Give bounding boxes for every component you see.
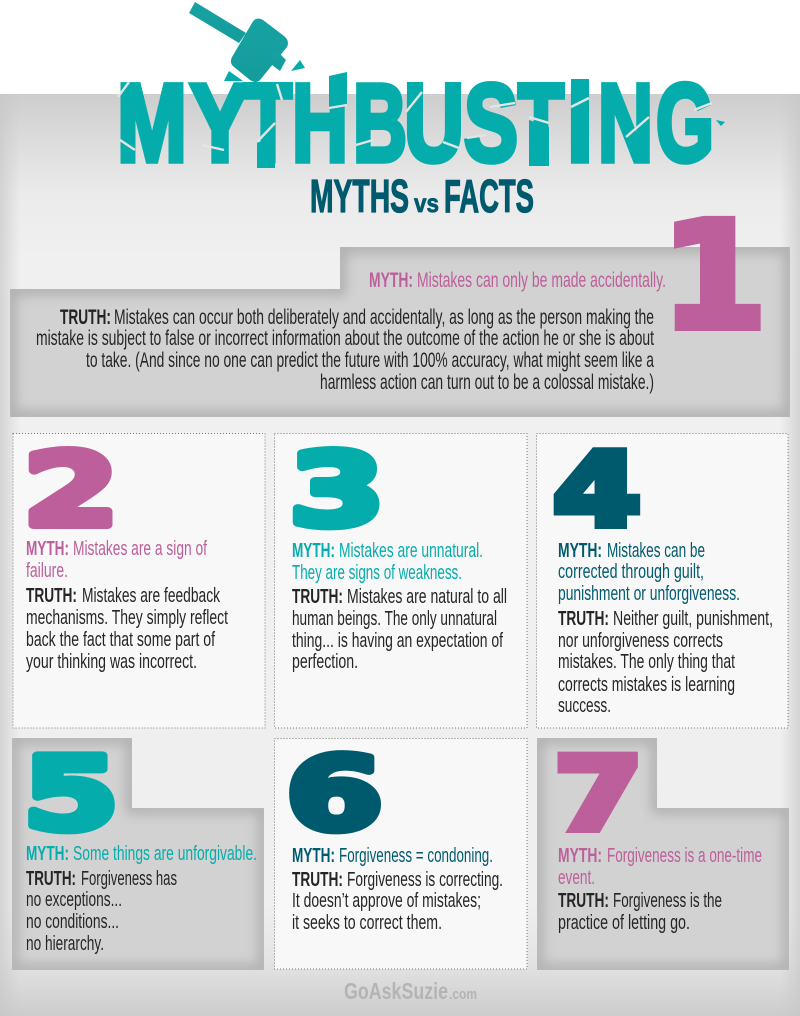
truth 6 text xyxy=(292,869,503,934)
number 5: 5 xyxy=(23,735,119,853)
subtitle: FACTS xyxy=(444,170,534,222)
truth 6 text: Forgiveness is correcting. xyxy=(347,869,503,891)
truth 3 text: thing... is having an expectation of xyxy=(292,630,503,652)
title: MYTHBUSTING: S xyxy=(464,62,518,185)
title: MYTHBUSTING: T xyxy=(244,62,292,185)
myth 4 text: corrected through guilt, xyxy=(558,561,704,583)
myth 3 text xyxy=(292,540,483,584)
panel: myth 7 xyxy=(537,735,789,970)
panel: myth 1 xyxy=(10,216,790,417)
myth 6 text: MYTH: xyxy=(292,845,335,867)
truth 4 text xyxy=(558,608,773,717)
myth 5 text: MYTH: xyxy=(26,843,69,865)
footer: GoAskSuzie.com: GoAskSuzie xyxy=(344,978,448,1004)
panel: myth 4 xyxy=(536,431,788,728)
number 1: 1 xyxy=(661,191,767,362)
truth 5 text: no exceptions... xyxy=(26,889,122,911)
truth 4 text: success. xyxy=(558,695,611,717)
title: MYTHBUSTING: M xyxy=(117,62,187,185)
number 7: 7 xyxy=(554,735,643,853)
myth 1 text: Mistakes can only be made accidentally. xyxy=(417,269,666,292)
myth 4 text: MYTH: xyxy=(558,540,602,562)
myth 3 text: MYTH: xyxy=(292,540,335,562)
myth 7 text: MYTH: xyxy=(558,845,602,867)
truth 5 text: no hierarchy. xyxy=(26,933,104,955)
truth 3 text: Mistakes are natural to all xyxy=(347,586,507,608)
truth 6 text: It doesn’t approve of mistakes; xyxy=(292,890,481,912)
subtitle: MYTHS xyxy=(310,170,409,222)
myth 1 text xyxy=(369,269,666,292)
myth 2 text: failure. xyxy=(26,560,68,582)
truth 5 text: Forgiveness has xyxy=(81,868,177,890)
title: MYTHBUSTING: N xyxy=(598,62,653,185)
truth 2 text: Mistakes are feedback xyxy=(82,585,221,607)
title: MYTHBUSTING xyxy=(117,62,725,185)
truth 2 text xyxy=(26,585,228,673)
truth 7 text: TRUTH: xyxy=(558,890,609,912)
truth 7 text: practice of letting go. xyxy=(558,912,690,934)
number 3: 3 xyxy=(289,431,385,549)
myth 2 text: Mistakes are a sign of xyxy=(73,538,207,560)
truth 6 text: it seeks to correct them. xyxy=(292,912,442,934)
myth 6 text: Forgiveness = condoning. xyxy=(339,845,493,867)
myth 4 text: Mistakes can be xyxy=(607,540,705,562)
number 6: 6 xyxy=(286,735,383,853)
title: MYTHBUSTING: B xyxy=(353,62,407,185)
myth 2 text: MYTH: xyxy=(26,538,69,560)
truth 4 text: nor unforgiveness corrects xyxy=(558,630,723,652)
panel: myth 2 xyxy=(13,431,265,728)
truth 5 text: no conditions... xyxy=(26,911,119,933)
subtitle: vs xyxy=(414,188,439,218)
myth 7 text xyxy=(558,845,762,889)
title: MYTHBUSTING: G xyxy=(656,62,714,185)
myth 5 text: Some things are unforgivable. xyxy=(73,843,257,865)
number 4: 4 xyxy=(553,431,641,549)
myth 3 text: Mistakes are unnatural. xyxy=(339,540,483,562)
myth 5 text xyxy=(26,843,257,865)
truth 7 text: Forgiveness is the xyxy=(613,890,722,912)
panel: myth 3 xyxy=(274,431,527,728)
truth 2 text: mechanisms. They simply reflect xyxy=(26,607,228,629)
truth 1 text xyxy=(36,306,654,394)
truth 5 text xyxy=(26,868,177,955)
title: MYTHBUSTING: I xyxy=(567,62,593,185)
panel: myth 5 xyxy=(12,735,264,970)
title: MYTHBUSTING: U xyxy=(404,62,464,185)
myth 7 text: event. xyxy=(558,867,595,889)
myth 1 text: MYTH: xyxy=(369,269,413,292)
truth 1 text: TRUTH: xyxy=(60,306,111,329)
footer: GoAskSuzie.com: .com xyxy=(449,986,477,1003)
title: MYTHBUSTING: Y xyxy=(190,62,250,185)
truth 5 text: TRUTH: xyxy=(26,868,76,890)
truth 6 text: TRUTH: xyxy=(292,869,343,891)
truth 2 text: TRUTH: xyxy=(26,585,77,607)
myth 4 text xyxy=(558,540,740,605)
title: MYTHBUSTING: H xyxy=(292,62,348,185)
truth 3 text xyxy=(292,586,507,673)
truth 3 text: TRUTH: xyxy=(292,586,343,608)
truth 3 text: human beings. The only unnatural xyxy=(292,608,497,630)
number 2: 2 xyxy=(23,431,119,549)
truth 7 text xyxy=(558,890,722,934)
myth 2 text xyxy=(26,538,207,582)
truth 2 text: back the fact that some part of xyxy=(26,629,215,651)
truth 3 text: perfection. xyxy=(292,651,358,673)
myth 6 text xyxy=(292,845,493,867)
panel: myth 6 xyxy=(274,735,527,969)
truth 4 text: TRUTH: xyxy=(558,608,609,630)
icon: hammer xyxy=(189,2,305,82)
myth 3 text: They are signs of weakness. xyxy=(292,562,462,584)
title: MYTHBUSTING: T xyxy=(518,62,564,185)
truth 2 text: your thinking was incorrect. xyxy=(26,651,197,673)
